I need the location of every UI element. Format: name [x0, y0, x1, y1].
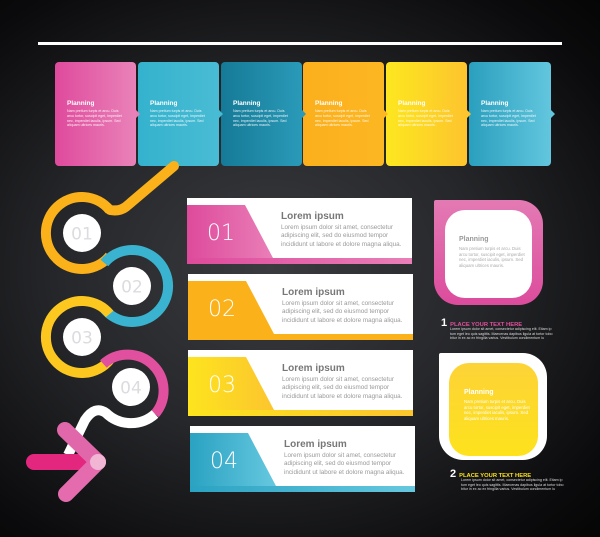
box 2 cyan: Planning: [150, 100, 177, 107]
connector orange: [110, 166, 174, 210]
box 4 orange: [303, 62, 384, 166]
ring 02: 02: [121, 278, 143, 298]
card 03: 03: [208, 373, 236, 398]
card 01: 01: [207, 221, 235, 246]
caption 2 body: Lorem ipsum dolor sit amet, consectetur adipiscing elit. Etiam ip tum eget leo quis sagittis. Maecenas dapibus ligula at tortor tobo bitur in ex ac ex fringilla varius. Vestibulum condimentum lu: [461, 478, 563, 491]
card 01: Lorem ipsum: [281, 211, 344, 222]
ring 01: 01: [71, 224, 93, 244]
box 5 yellow: [386, 62, 467, 166]
box 4 orange: Nam pretium turpis et arcu. Duis arcu tortor, suscipit eget, imperdiet nec, imperdiet iaculis, ipsum. Sed aliquam ultrices mauris.: [315, 109, 370, 127]
ring 01: [46, 197, 110, 269]
card 01: [187, 198, 412, 264]
top process boxes: [55, 62, 555, 166]
card 03: Lorem ipsum dolor sit amet, consectetur adipiscing elit, sed do eiusmod tempor incididunt ut labore et dolore magna aliqua.: [282, 376, 402, 400]
box 4 orange: Planning: [315, 100, 342, 107]
box 5 yellow: Nam pretium turpis et arcu. Duis arcu tortor, suscipit eget, imperdiet nec, imperdiet iaculis, ipsum. Sed aliquam ultrices mauris.: [398, 109, 453, 127]
card 02: Lorem ipsum: [282, 287, 345, 298]
panel 1 inner: Nam pretium turpis et arcu. Duis arcu tortor, suscipit eget, imperdiet nec, imperdiet iaculis, ipsum. Sed aliquam ultrices mauris.: [459, 246, 525, 268]
box 3 teal: [221, 62, 302, 166]
ring 03: 03: [71, 328, 93, 348]
ring 04: [68, 355, 164, 455]
panel 1 pink frame: [434, 200, 543, 305]
card 04: Lorem ipsum dolor sit amet, consectetur adipiscing elit, sed do eiusmod tempor incididunt ut labore et dolore magna aliqua.: [284, 452, 404, 476]
card 04: 04: [210, 449, 238, 474]
card 02: [188, 274, 413, 340]
box 3 teal: Nam pretium turpis et arcu. Duis arcu tortor, suscipit eget, imperdiet nec, imperdiet iaculis, ipsum. Sed aliquam ultrices mauris.: [233, 109, 288, 127]
box 6 blue: Nam pretium turpis et arcu. Duis arcu tortor, suscipit eget, imperdiet nec, imperdiet iaculis, ipsum. Sed aliquam ultrices mauris.: [481, 109, 536, 127]
ring 04: 04: [120, 378, 142, 398]
card 01: Lorem ipsum dolor sit amet, consectetur adipiscing elit, sed do eiusmod tempor incididunt ut labore et dolore magna aliqua.: [281, 224, 401, 248]
card 03: Lorem ipsum: [282, 363, 345, 374]
card 03: [188, 350, 413, 416]
box 5 yellow: Planning: [398, 100, 425, 107]
box 2 cyan: [138, 62, 219, 166]
box 6 blue: Planning: [481, 100, 508, 107]
box 2 cyan: Nam pretium turpis et arcu. Duis arcu tortor, suscipit eget, imperdiet nec, imperdiet iaculis, ipsum. Sed aliquam ultrices mauris.: [150, 109, 205, 127]
box 1 pink: Planning: [67, 100, 94, 107]
card 02: Lorem ipsum dolor sit amet, consectetur adipiscing elit, sed do eiusmod tempor incididunt ut labore et dolore magna aliqua.: [282, 300, 402, 324]
top line: [38, 42, 562, 45]
box 1 pink: [55, 62, 136, 166]
panel 2 white frame: [439, 353, 547, 460]
panel 2 inner: [449, 363, 538, 456]
ring 02: [104, 250, 168, 322]
panel 1 inner: Planning: [459, 236, 489, 243]
box 1 pink: Nam pretium turpis et arcu. Duis arcu tortor, suscipit eget, imperdiet nec, imperdiet iaculis, ipsum. Sed aliquam ultrices mauris.: [67, 109, 122, 127]
timeline path with numbered circles: [26, 161, 179, 502]
card 04: [190, 426, 415, 492]
card 02: 02: [208, 297, 236, 322]
ring 03: [46, 301, 110, 373]
card 04: Lorem ipsum: [284, 439, 347, 450]
caption 1 body: Lorem ipsum dolor sit amet, consectetur adipiscing elit. Etiam ip tum eget leo quis sagittis. Maecenas dapibus ligula at tortor tobo bitur in ex ac ex fringilla varius. Vestibulum condimentum lu: [450, 327, 552, 340]
box 3 teal: Planning: [233, 100, 260, 107]
box 6 blue: [469, 62, 551, 166]
panel 1 inner: [445, 210, 532, 298]
panel 2 inner: Nam pretium turpis et arcu. Duis arcu tortor, suscipit eget, imperdiet nec, imperdiet iaculis, ipsum. Sed aliquam ultrices mauris.: [464, 399, 530, 421]
panel 2 inner: Planning: [464, 389, 494, 396]
arrow: [34, 430, 106, 494]
caption 2: 2 PLACE YOUR TEXT HERE: [450, 468, 531, 480]
caption 1: 1 PLACE YOUR TEXT HERE: [441, 317, 522, 329]
